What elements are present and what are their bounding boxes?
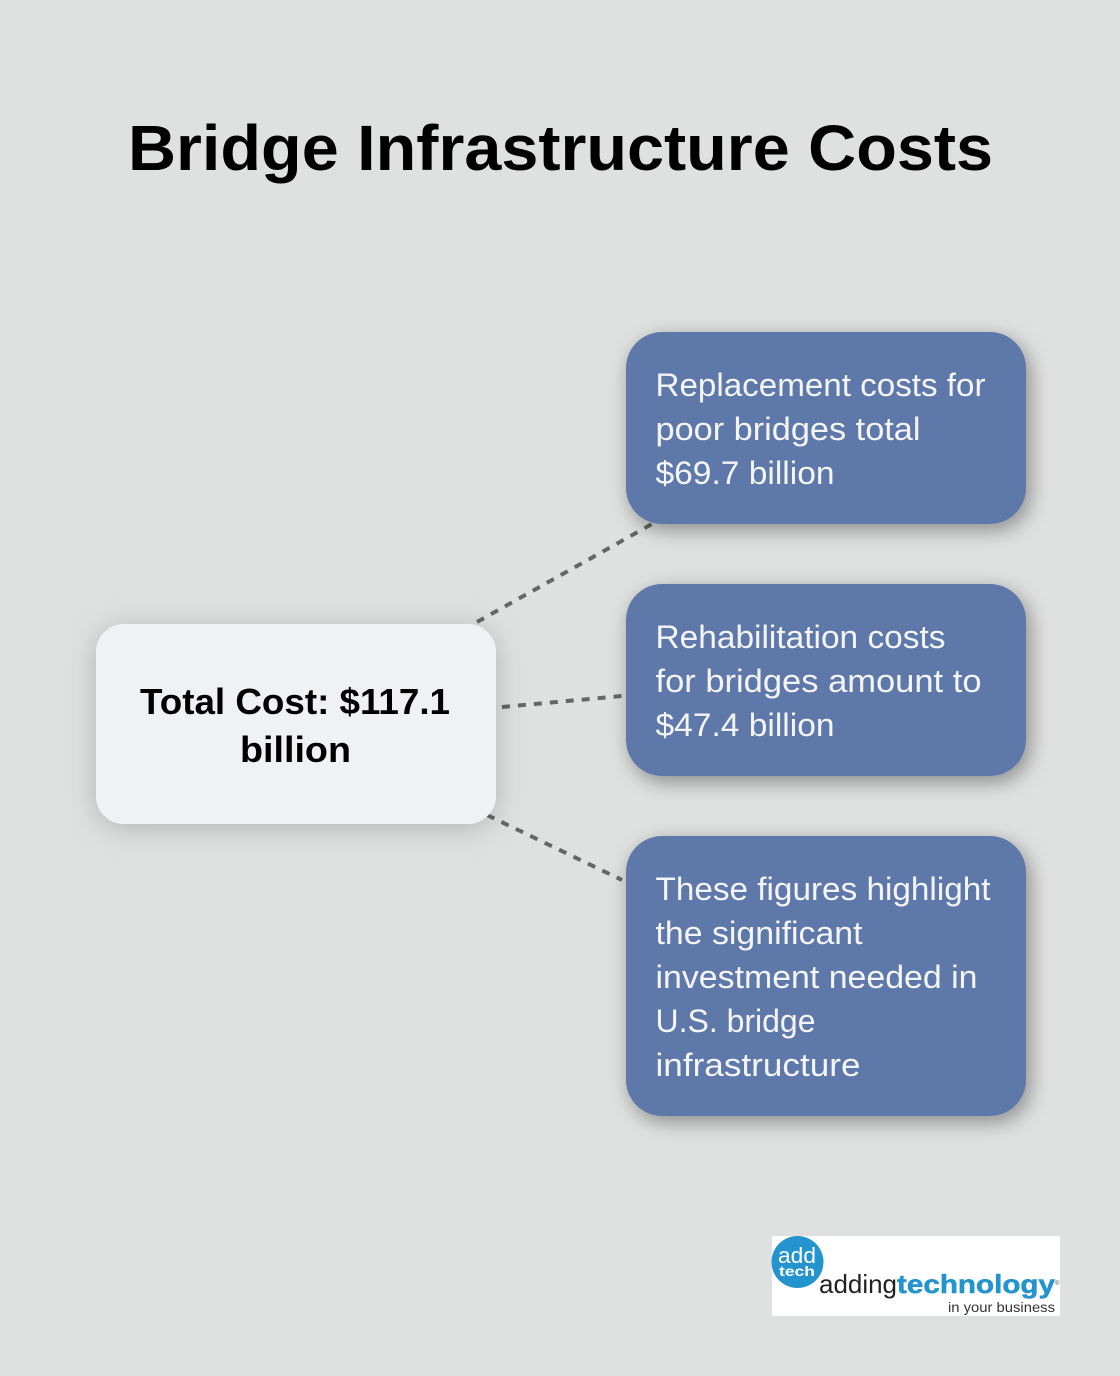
logo tagline: in your business [948,1299,1055,1315]
logo wordmark: adding [819,1269,897,1299]
panel: total cost [96,624,496,824]
connector: total to investment note [487,815,622,880]
logo badge add: add [778,1243,816,1268]
replacement costs text: poor bridges total [656,411,920,447]
connector: total to rehabilitation [502,696,622,707]
logo wordmark: technology [897,1269,1056,1299]
logo registered mark: ® [1055,1280,1060,1287]
investment note text: infrastructure [656,1047,860,1083]
investment note text: the significant [656,915,863,951]
logo: addtech [772,1236,1060,1316]
logo badge tech: tech [779,1263,815,1279]
title: Bridge Infrastructure Costs [128,112,993,184]
investment note text: These figures highlight [656,871,991,907]
rehabilitation costs text: for bridges amount to [656,663,982,699]
investment note text: investment needed in [656,959,978,995]
replacement costs text: Replacement costs for [656,367,986,403]
panel: investment note [626,836,1026,1116]
rehabilitation costs text: Rehabilitation costs [656,619,946,655]
total cost text: Total Cost: $117.1 [140,681,450,722]
investment note text: U.S. bridge [656,1003,816,1039]
replacement costs text: $69.7 billion [656,455,834,491]
panel: rehabilitation costs [626,584,1026,776]
total cost text: billion [240,729,351,770]
rehabilitation costs text: $47.4 billion [656,707,834,743]
logo badge [772,1236,824,1288]
panel: replacement costs [626,332,1026,524]
connector: total to replacement [477,524,652,622]
